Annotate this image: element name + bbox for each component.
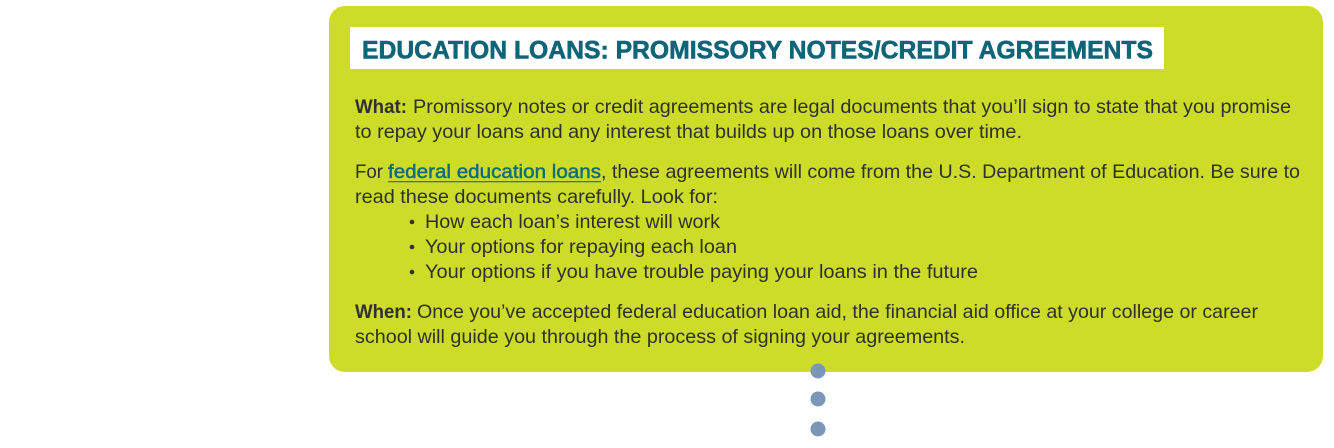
text block: when: When: [355,301,412,323]
text block: federal education loans: read these documents carefully. Look for: [355,186,718,208]
text block: what: to repay your loans and any interest that builds up on those loans over time. [355,121,1022,143]
text block: when [355,301,1259,348]
text block: what [355,96,1291,143]
text block: when: Once you’ve accepted federal education loan aid, the financial aid office at your college or career [417,301,1259,323]
text block: what: Promissory notes or credit agreements are legal documents that you’ll sign to state that you promise [413,96,1291,118]
panel: promissory notes [329,6,1323,372]
text block: when: school will guide you through the process of signing your agreements. [355,326,965,348]
heading: EDUCATION LOANS: PROMISSORY NOTES/CREDIT AGREEMENTS [362,36,1153,64]
text block: what: What: [355,96,407,118]
text block: federal education loans: federal education loans [388,161,601,183]
bullet list: Your options for repaying each loan [425,236,737,258]
connector dots [810,364,826,436]
bullet list: Your options if you have trouble paying your loans in the future [425,261,978,283]
bullet list: How each loan’s interest will work [425,211,720,233]
text block: federal education loans: , these agreements will come from the U.S. Department of Education. Be sure to [601,161,1300,183]
text block: federal education loans [355,161,1300,208]
heading [350,27,1164,69]
bullet list [410,211,978,283]
text block: federal education loans: For [355,161,383,183]
